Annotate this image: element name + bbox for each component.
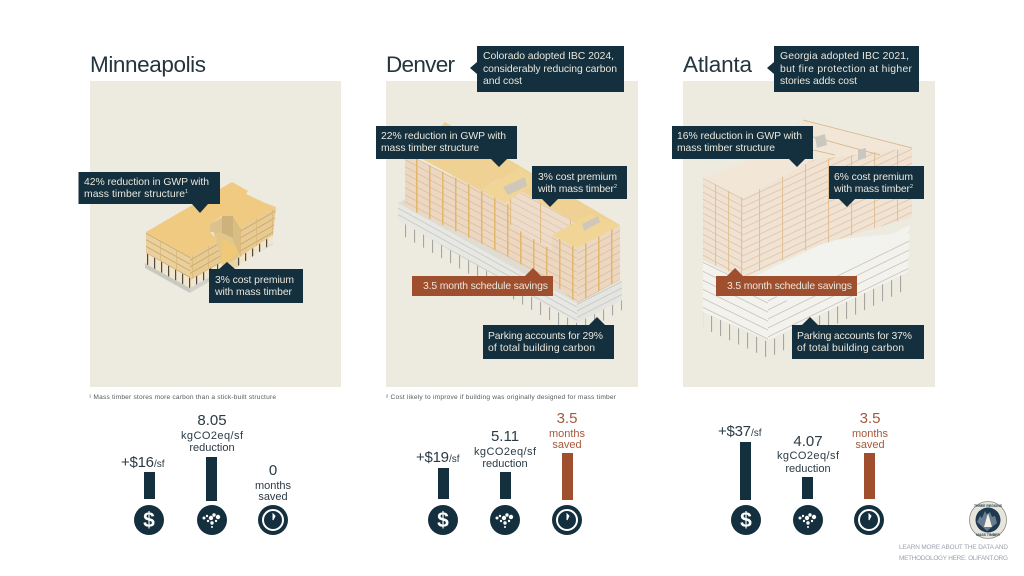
callout: parking: Parking accounts for 29% (488, 331, 603, 342)
bar: carbon: 5.11 (491, 428, 519, 445)
callout: cost premium: with mass timber (214, 287, 293, 298)
callout: GWP reduction (78, 172, 220, 213)
icon: carbon dots (197, 505, 227, 535)
callout: GWP reduction (376, 126, 517, 167)
callout: GWP reduction: mass timber structure (677, 143, 775, 154)
panel background: Atlanta (683, 81, 935, 387)
stat: schedule (255, 462, 292, 503)
callout: GWP reduction: 16% reduction in GWP with (677, 131, 802, 142)
callout: schedule savings: 3.5 month schedule savings (727, 281, 852, 292)
icon: clock (854, 505, 884, 535)
bar: cost: +$16 (121, 454, 154, 471)
bar: carbon (777, 433, 840, 499)
callout: schedule savings (412, 268, 553, 296)
callout: GWP reduction (672, 126, 813, 167)
callout: cost premium: with mass timber (833, 184, 911, 195)
bar: schedule: saved (552, 439, 582, 451)
bar: carbon: 8.05 (197, 412, 227, 429)
callout: state code: Colorado adopted IBC 2024, (483, 51, 614, 62)
callout: parking (792, 317, 924, 359)
panel background: Denver (386, 81, 638, 387)
building illustration: Atlanta (703, 120, 912, 358)
footer: source note: METHODOLOGY HERE: OLIFANT.ORG (899, 555, 1008, 562)
icon: carbon dots (793, 505, 823, 535)
callout: cost premium: 2 (614, 184, 617, 190)
callout: schedule savings (716, 268, 857, 296)
icon: dollar (134, 505, 164, 535)
callout: GWP reduction: mass timber structure (84, 189, 185, 200)
callout: parking: Parking accounts for 37% (797, 331, 912, 342)
callout: GWP reduction: 42% reduction in GWP with (84, 177, 209, 188)
callout: cost premium (829, 166, 924, 207)
callout: state code: but fire protection at higher (780, 64, 913, 75)
logo: Three Regions Mass Timber seal: THREE REGIONS (974, 504, 1003, 508)
bar: schedule (852, 410, 889, 499)
icon: dollar (731, 505, 761, 535)
footnote: ² Cost likely to improve if building was originally designed for mass timber (386, 394, 617, 401)
bar: schedule: months (549, 428, 586, 440)
bar: carbon (181, 412, 244, 501)
callout: schedule savings: 3.5 month schedule savings (423, 281, 548, 292)
callout: GWP reduction: 1 (185, 189, 188, 195)
bar: carbon: reduction (189, 442, 235, 454)
bar: carbon: kgCO2eq/sf (181, 430, 244, 442)
footer: source note (899, 544, 1008, 562)
bar: schedule: 3.5 (860, 410, 880, 427)
callout: state code: considerably reducing carbon (483, 64, 617, 75)
stat: schedule: saved (258, 491, 288, 503)
callout: cost premium: 2 (910, 184, 913, 190)
bar: cost (121, 454, 165, 499)
bar: carbon: kgCO2eq/sf (474, 446, 537, 458)
bar: carbon: reduction (785, 463, 831, 475)
callout: state code (767, 46, 919, 92)
icon: clock (258, 505, 288, 535)
callout: cost premium (532, 166, 627, 207)
icon: carbon dots (490, 505, 520, 535)
bar: cost (416, 449, 460, 499)
bar: carbon: reduction (482, 458, 528, 470)
callout: parking (483, 317, 614, 359)
bar: cost: +$19 (416, 449, 449, 466)
callout: cost premium: with mass timber (537, 184, 615, 195)
panel background: Minneapolis (90, 81, 341, 387)
bar: carbon (474, 428, 537, 499)
callout: state code (470, 46, 624, 92)
logo: Three Regions Mass Timber seal: MASS TIMBER (976, 533, 1000, 537)
bar: cost: /sf (751, 428, 762, 439)
callout: state code: Georgia adopted IBC 2021, (780, 51, 909, 62)
bar: cost (718, 423, 762, 500)
panel: Denver (376, 46, 638, 535)
panel: Minneapolis (78, 52, 341, 535)
footnote: ¹ Mass timber stores more carbon than a stick-built structure (89, 394, 276, 401)
callout: GWP reduction: 22% reduction in GWP with (381, 131, 506, 142)
heading: Denver: Denver (386, 52, 456, 77)
icon: clock (552, 505, 582, 535)
callout: parking: of total building carbon (797, 343, 904, 354)
callout: cost premium: 3% cost premium (538, 172, 617, 183)
building illustration: Minneapolis (145, 182, 276, 293)
callout: cost premium: 6% cost premium (834, 172, 913, 183)
heading: Minneapolis: Minneapolis (90, 52, 206, 77)
bar: schedule: 3.5 (557, 410, 577, 427)
footer: source note: LEARN MORE ABOUT THE DATA AND (899, 544, 1008, 551)
bar: carbon: 4.07 (793, 433, 823, 450)
stat: schedule: 0 (269, 462, 277, 479)
panel: Atlanta (672, 46, 935, 535)
stat: schedule: months (255, 480, 292, 492)
building illustration: Denver (398, 122, 622, 336)
callout: parking: of total building carbon (488, 343, 595, 354)
callout: cost premium (209, 262, 303, 303)
bar: cost: /sf (449, 454, 460, 465)
bar: cost: +$37 (718, 423, 751, 440)
callout: GWP reduction: mass timber structure (381, 143, 479, 154)
logo: Three Regions Mass Timber seal (970, 502, 1006, 538)
callout: cost premium: 3% cost premium (215, 275, 294, 286)
icon: dollar: $ (437, 509, 449, 532)
bar: carbon: kgCO2eq/sf (777, 450, 840, 462)
icon: dollar: $ (740, 509, 752, 532)
icon: dollar: $ (143, 509, 155, 532)
callout: state code: stories adds cost (780, 76, 857, 87)
bar: schedule: months (852, 428, 889, 440)
icon: dollar (428, 505, 458, 535)
bar: schedule: saved (855, 439, 885, 451)
callout: state code: and cost (483, 76, 522, 87)
bar: cost: /sf (154, 459, 165, 470)
heading: Atlanta: Atlanta (683, 52, 752, 77)
bar: schedule (549, 410, 586, 500)
